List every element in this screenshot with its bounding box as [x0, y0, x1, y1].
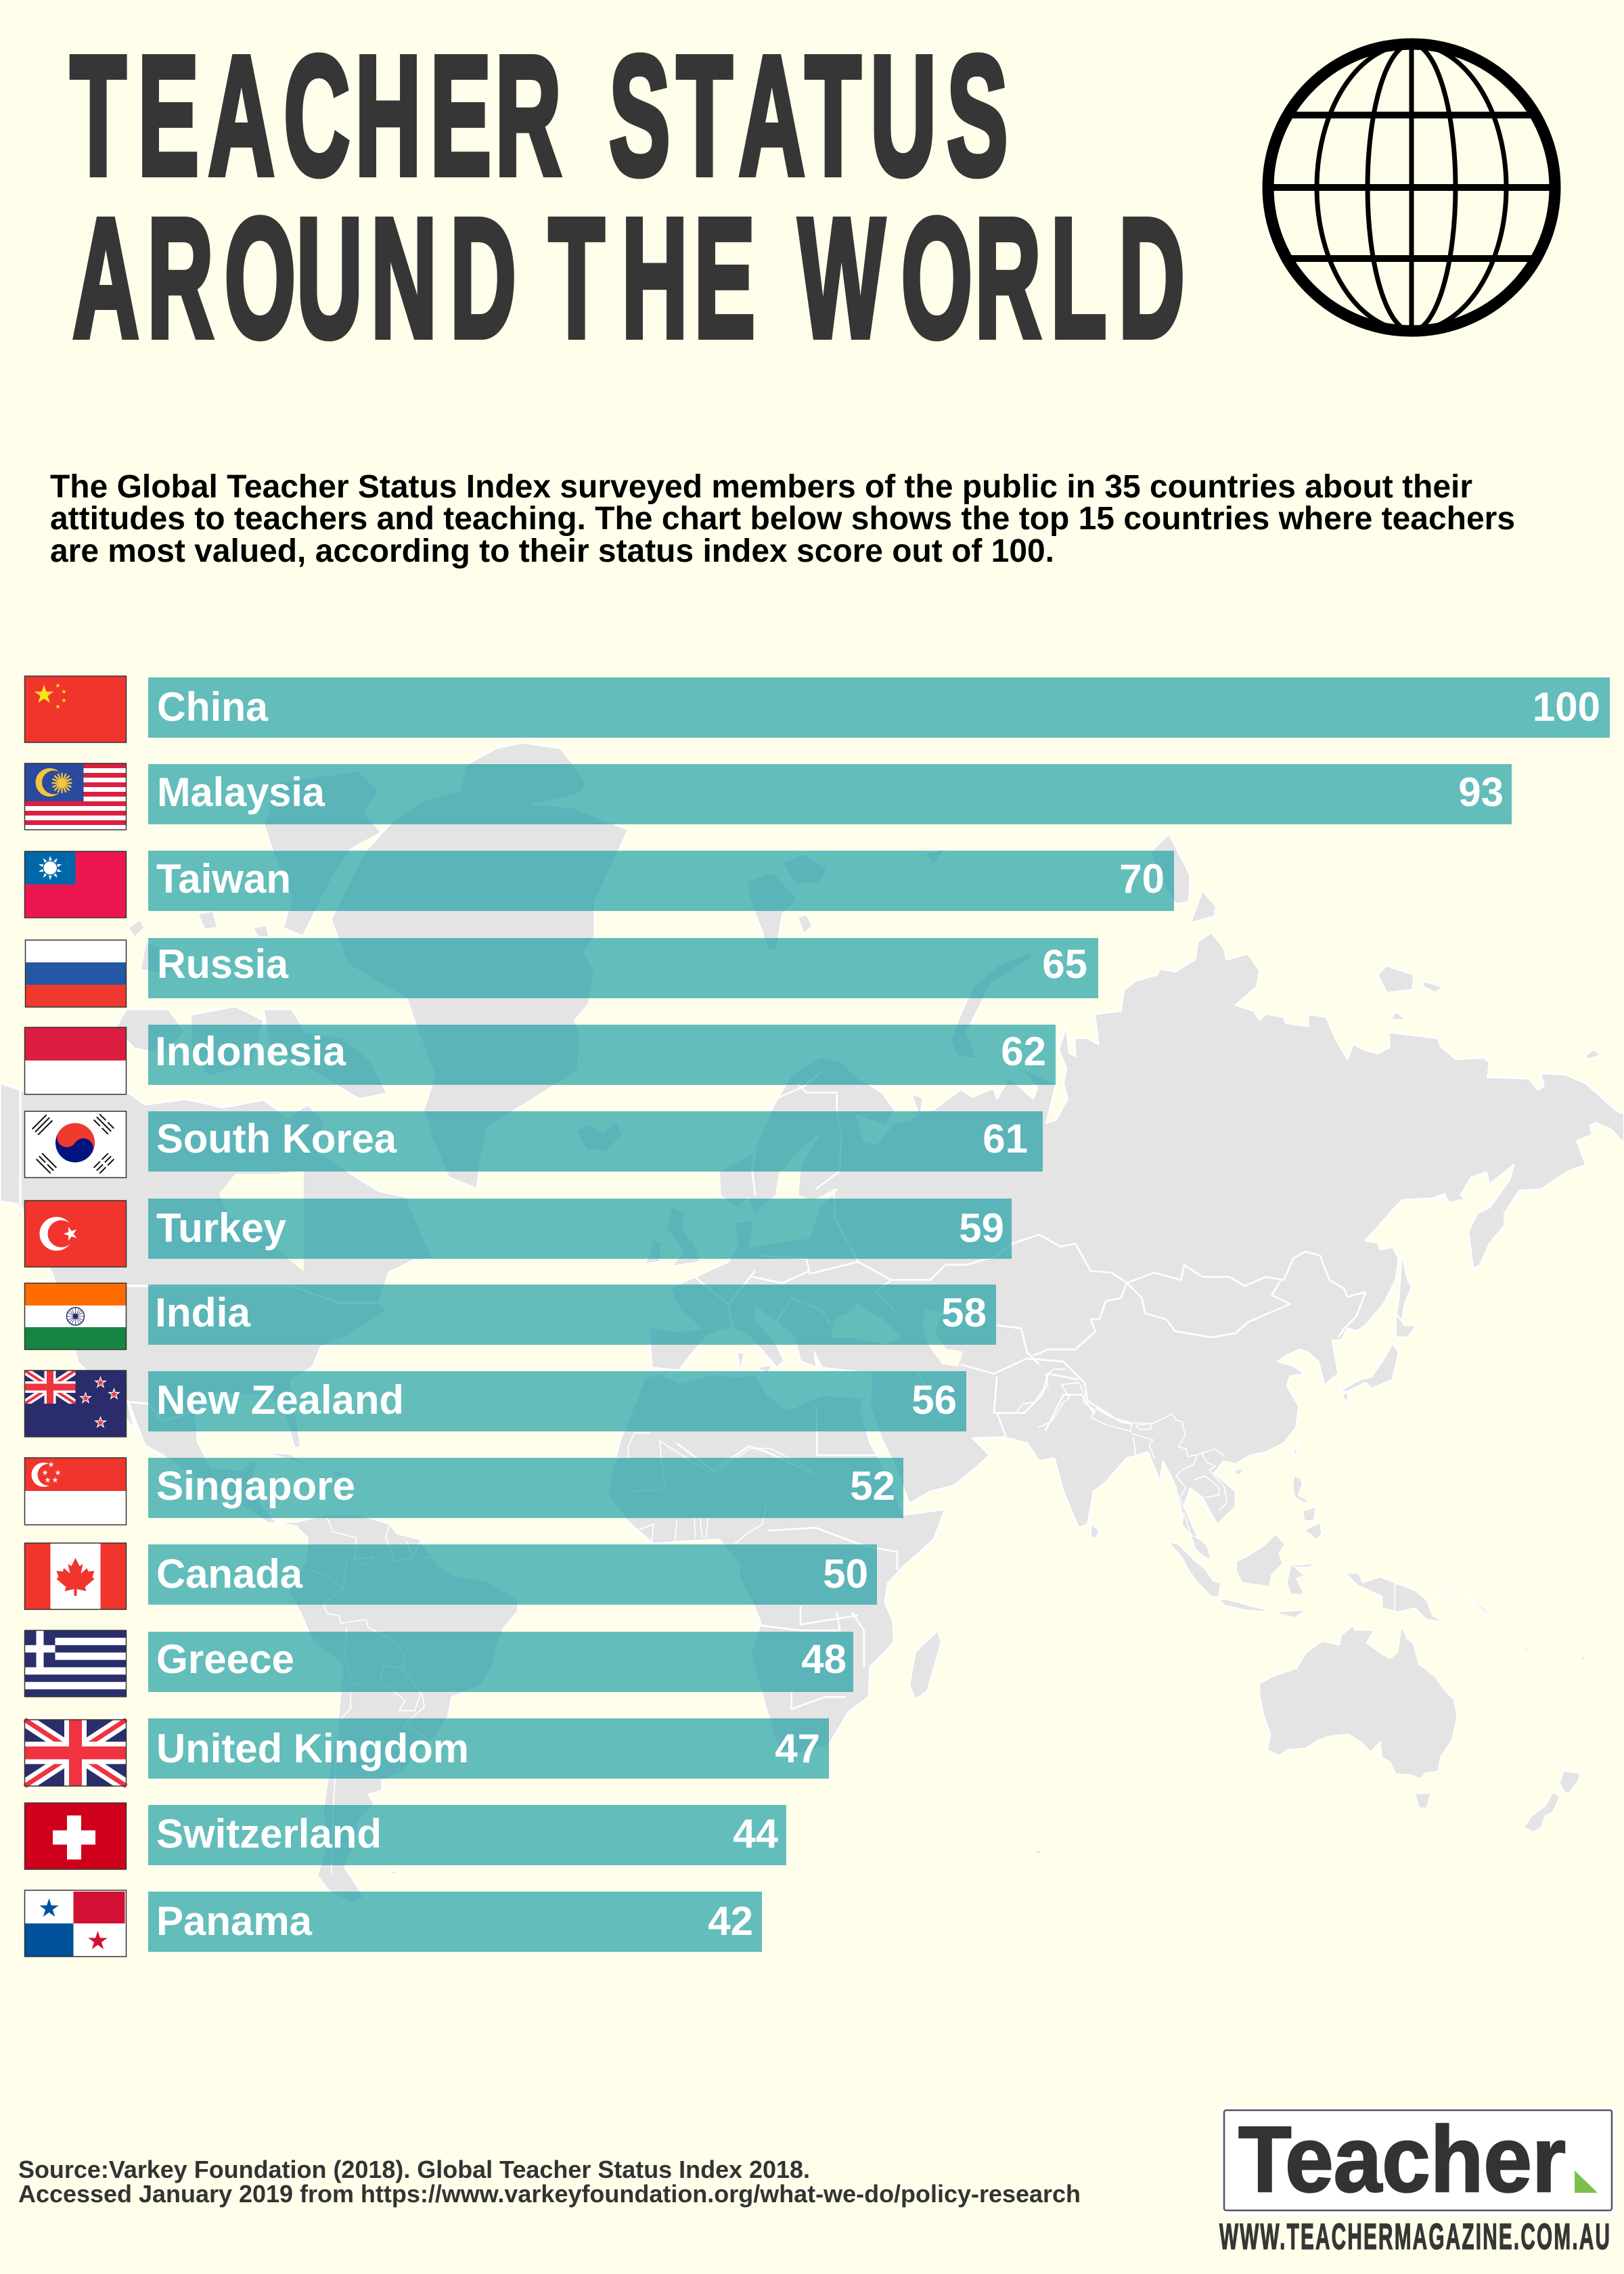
West African borders — [611, 1433, 812, 1544]
flag: Singapore — [24, 1458, 126, 1525]
bar: China — [148, 677, 1610, 738]
bar: Canada — [148, 1544, 877, 1605]
bar: Turkey: 59 — [959, 1205, 1004, 1251]
website url: WWW.TEACHERMAGAZINE.COM.AU — [1219, 2217, 1610, 2257]
Islands of the north and Europe — [746, 872, 798, 951]
bar: South Korea: South Korea — [156, 1116, 397, 1161]
source note: Accessed January 2019 from https://www.varkeyfoundation.org/what-we-do/policy-research — [18, 2180, 1081, 2208]
bar: Taiwan — [148, 851, 1174, 911]
bar: Malaysia — [148, 764, 1512, 824]
title: THE — [549, 183, 755, 373]
Caspian Sea — [923, 1310, 962, 1366]
bar: Indonesia — [148, 1025, 1056, 1085]
bar: Singapore — [148, 1458, 903, 1518]
arctic islands and Greenland — [115, 742, 628, 1270]
intro text: attitudes to teachers and teaching. The chart below shows the top 15 countries where teachers — [50, 501, 1515, 537]
bar: United Kingdom — [148, 1718, 829, 1779]
bar: Switzerland — [148, 1805, 786, 1865]
bar: Malaysia: 93 — [1458, 770, 1504, 815]
flag: Switzerland — [24, 1803, 126, 1869]
bar: United Kingdom: United Kingdom — [156, 1726, 469, 1771]
bar: Taiwan: Taiwan — [156, 856, 291, 901]
bar: China: 100 — [1533, 684, 1600, 730]
country borders across Asia — [677, 1071, 1366, 1709]
flag: Taiwan — [24, 851, 126, 918]
title: STATUS — [609, 21, 1008, 210]
bar: New Zealand — [148, 1371, 966, 1431]
Central America islands and South America — [267, 1452, 518, 1903]
flag: Greece — [24, 1630, 126, 1697]
bar: Panama: 42 — [708, 1898, 753, 1944]
bar: Malaysia: Malaysia — [157, 770, 325, 815]
bar chart — [148, 677, 1610, 1952]
bar: Canada: Canada — [156, 1551, 303, 1597]
flag: Russia — [26, 940, 126, 1007]
flag: Canada — [24, 1543, 126, 1609]
background world map — [0, 742, 1624, 1903]
icon: globe — [1268, 44, 1555, 331]
bar: Indonesia: 62 — [1001, 1029, 1046, 1074]
intro text: The Global Teacher Status Index surveyed members of the public in 35 countries about their — [50, 469, 1472, 505]
source note: Source:Varkey Foundation (2018). Global Teacher Status Index 2018. — [18, 2156, 810, 2183]
flag: China — [24, 676, 126, 742]
intro text — [50, 469, 1515, 569]
bar: South Korea — [148, 1111, 1043, 1172]
title: WORLD — [798, 183, 1185, 373]
flag: South Korea — [24, 1111, 126, 1178]
bar: Panama — [148, 1892, 762, 1952]
bar: Indonesia: Indonesia — [155, 1029, 346, 1074]
bar: Russia: Russia — [157, 941, 289, 987]
bar: Turkey: Turkey — [156, 1205, 287, 1251]
Islands of east Asia — [1393, 1253, 1412, 1337]
bar: Russia: 65 — [1042, 941, 1087, 987]
bar: Panama: Panama — [156, 1898, 313, 1944]
intro text: are most valued, according to their status index score out of 100. — [50, 533, 1054, 569]
bar: United Kingdom: 47 — [775, 1726, 820, 1771]
bar: Taiwan: 70 — [1119, 856, 1165, 901]
title: TEACHER — [70, 21, 561, 210]
Eurasia — [645, 834, 1624, 1709]
flag: Panama — [24, 1890, 126, 1957]
bar: New Zealand: New Zealand — [156, 1377, 404, 1423]
bar: New Zealand: 56 — [911, 1377, 957, 1423]
bar: South Korea: 61 — [983, 1116, 1028, 1161]
flag: New Zealand — [24, 1370, 126, 1437]
Baltic Sea — [749, 1135, 837, 1247]
North American borders — [20, 1083, 386, 1421]
flag: Turkey — [24, 1201, 126, 1267]
flag: United Kingdom — [24, 1720, 126, 1786]
bar: Singapore: Singapore — [156, 1463, 355, 1509]
title: AROUND — [73, 183, 516, 373]
bar: Greece: Greece — [156, 1636, 294, 1682]
bar: Greece — [148, 1632, 853, 1692]
Africa — [607, 1374, 945, 1754]
bar: Canada: 50 — [823, 1551, 868, 1597]
bar: Greece: 48 — [801, 1636, 847, 1682]
bar: India: 58 — [941, 1290, 987, 1335]
bar: Switzerland: Switzerland — [156, 1811, 382, 1856]
flag: Malaysia — [24, 763, 126, 830]
flag: Indonesia — [24, 1027, 126, 1094]
logo: Teacher magazine: Teacher — [1238, 2108, 1566, 2212]
North America mainland — [0, 1076, 433, 1524]
source note — [18, 2156, 1081, 2208]
Southeast Asia and Oceania — [1015, 1369, 1590, 1854]
bar: India: India — [155, 1290, 251, 1335]
bar: India — [148, 1285, 996, 1345]
bar: Switzerland: 44 — [733, 1811, 779, 1856]
bar: Turkey — [148, 1199, 1012, 1259]
title — [70, 21, 1185, 373]
bar: Russia — [148, 938, 1098, 998]
bar: China: China — [157, 684, 269, 730]
flags column — [24, 676, 126, 1957]
Australia — [1260, 1626, 1457, 1779]
Black Sea — [832, 1304, 900, 1343]
bar: Singapore: 52 — [850, 1463, 895, 1509]
flag: India — [24, 1283, 126, 1350]
